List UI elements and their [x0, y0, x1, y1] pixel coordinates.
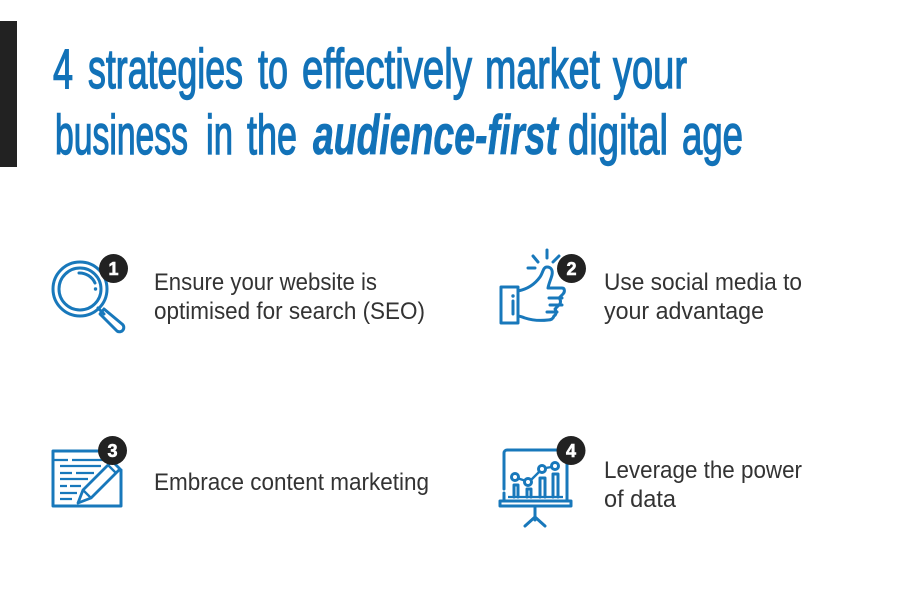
icon: thumbs up: [501, 250, 564, 323]
icon: presentation board with chart: [500, 450, 571, 526]
text: strategy 1: [154, 269, 425, 325]
icon: magnifying glass: [53, 262, 124, 332]
badge 2: [557, 254, 586, 283]
text: strategy 2: Use social media to: [604, 269, 802, 296]
badge 1: 1: [108, 259, 119, 279]
text: strategy 4: of data: [604, 486, 677, 513]
text: strategy 1: Ensure your website is: [154, 269, 377, 296]
title: 4: [53, 37, 73, 100]
badge 3: [98, 436, 127, 465]
badge 4: [556, 436, 586, 465]
title: [53, 37, 743, 166]
title: your: [613, 37, 687, 100]
text: strategy 3: Embrace content marketing: [154, 469, 429, 496]
badge 1: [99, 254, 128, 283]
title: audience-first: [313, 103, 560, 166]
icon: document and pencil: [53, 451, 121, 506]
badge 3: 3: [107, 441, 118, 461]
title: age: [682, 103, 743, 166]
strategy 1: [53, 254, 425, 332]
badge 4: 4: [566, 441, 576, 461]
text: strategy 4: [604, 457, 802, 513]
badge 2: 2: [566, 259, 577, 279]
text: strategy 2: your advantage: [604, 298, 764, 325]
title: business: [55, 103, 188, 166]
strategy 3: [53, 436, 429, 506]
title: market: [485, 37, 600, 100]
title: to: [258, 37, 288, 100]
title: digital: [568, 103, 668, 166]
title: the: [247, 103, 297, 166]
text: strategy 2: [604, 269, 802, 325]
title: effectively: [302, 37, 472, 100]
title: strategies: [88, 37, 243, 100]
title: in: [206, 103, 233, 166]
text: strategy 4: Leverage the power: [604, 457, 802, 484]
accent bar: [0, 21, 17, 167]
strategy 4: [500, 436, 802, 526]
strategy 2: [501, 250, 802, 325]
text: strategy 1: optimised for search (SEO): [154, 298, 425, 325]
